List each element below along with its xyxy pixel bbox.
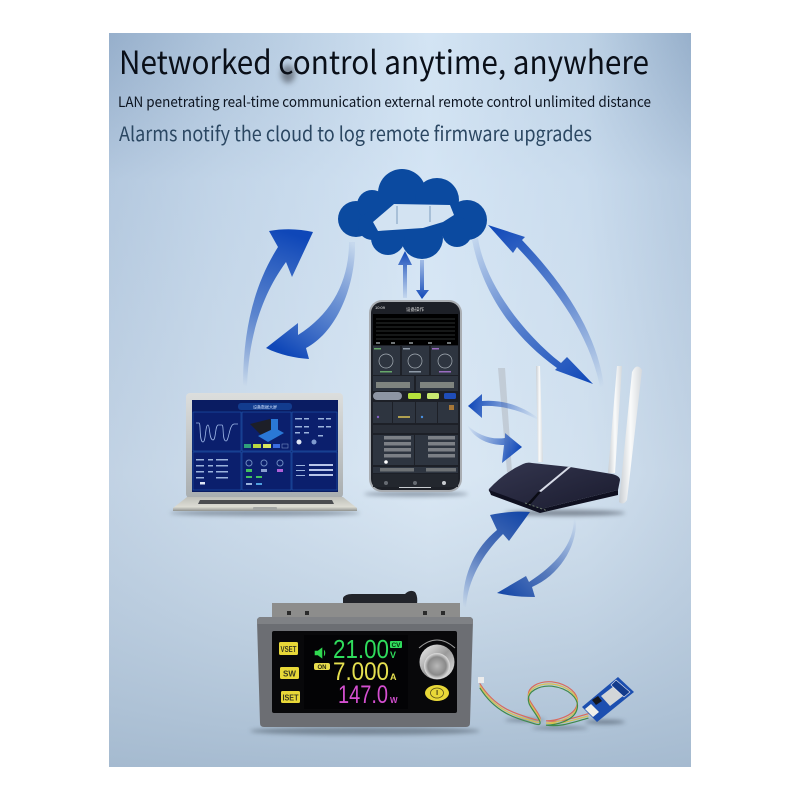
shadow under laptop <box>170 510 360 516</box>
fan <box>343 591 417 604</box>
router antennas <box>498 366 622 473</box>
wifi module with cable <box>478 677 634 730</box>
cv badge: CV <box>391 642 401 649</box>
knob <box>419 640 455 680</box>
connector <box>478 677 484 683</box>
module housing <box>257 603 473 727</box>
amps unit: A <box>390 672 397 682</box>
subtitle line: LAN penetrating real-time communication external remote control unlimited distance <box>118 91 651 112</box>
current readout: 7.000 <box>333 658 389 686</box>
phone buttons <box>373 392 456 400</box>
phone status panels <box>373 402 458 423</box>
laptop screen: 设备数据大屏 <box>253 404 277 410</box>
power readout: 147.0 <box>338 681 388 709</box>
phone settings <box>373 425 458 488</box>
arrow: cloud to router downward curve <box>472 238 593 384</box>
phone set fields <box>373 376 458 391</box>
background panel <box>109 33 691 767</box>
router tall antenna <box>619 366 642 504</box>
colour display <box>304 634 408 709</box>
router body <box>489 463 620 513</box>
laptop lid <box>186 393 343 498</box>
arrow: cloud to laptop upward curve <box>243 229 313 386</box>
router shadow <box>505 510 625 516</box>
phone gauges <box>373 346 458 375</box>
buttons <box>279 642 300 703</box>
power supply module <box>250 591 480 735</box>
power button <box>425 685 449 701</box>
on badge: ON <box>318 665 326 671</box>
arrow: device to router <box>463 512 530 607</box>
arrow: phone to router <box>467 425 522 463</box>
alarms line: Alarms notify the cloud to log remote firmware upgrades <box>119 118 592 147</box>
router <box>489 366 642 516</box>
cable <box>480 682 588 726</box>
volts unit: V <box>390 650 396 660</box>
voltage readout: 21.00 <box>333 634 389 664</box>
shadow under phone <box>364 492 468 496</box>
arrow: phone to cloud <box>398 251 412 298</box>
arrow: router to device <box>497 518 576 597</box>
shadows <box>505 718 625 730</box>
arrow: router to cloud upward curve <box>488 225 604 387</box>
smartphone <box>369 300 462 492</box>
arrow: cloud to phone <box>416 260 429 299</box>
buttons: ISET <box>282 694 299 702</box>
watts unit: W <box>390 696 398 705</box>
buttons: SW <box>283 670 296 678</box>
smartphone: 设备操作 <box>406 306 424 313</box>
icon: cloud <box>338 169 487 259</box>
laptop screen <box>192 400 338 492</box>
laptop base <box>173 497 357 511</box>
phone chart <box>373 314 458 345</box>
buttons: VSET <box>280 645 297 654</box>
speaker icon <box>315 648 325 658</box>
laptop <box>173 393 357 511</box>
arrow: cloud to laptop downward curve <box>266 242 355 359</box>
arrow: router to phone <box>468 394 538 420</box>
smartphone: 10:09 <box>375 305 386 310</box>
circuit board <box>582 677 634 722</box>
title: Networked control anytime, anywhere <box>119 38 649 84</box>
